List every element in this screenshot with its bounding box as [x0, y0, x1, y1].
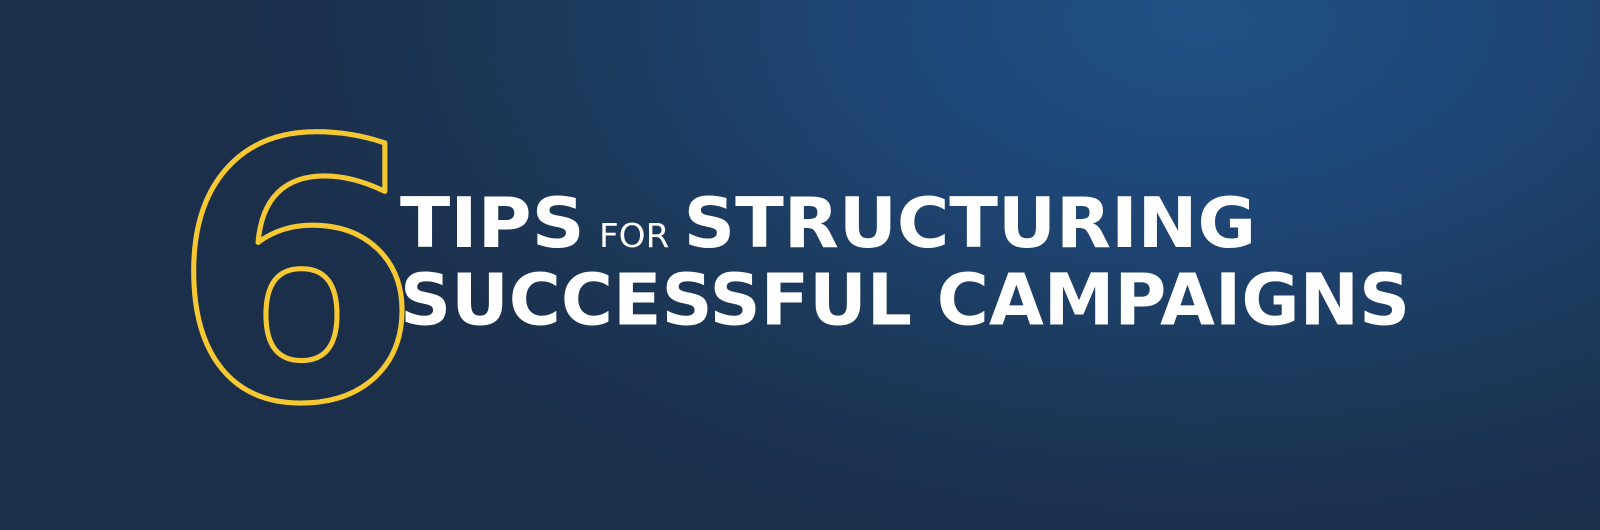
title line 1: TIPS: [400, 184, 585, 264]
title line 1: [400, 184, 1256, 264]
title: [400, 184, 1410, 341]
title line 1: STRUCTURING: [684, 184, 1256, 264]
title line 1: FOR: [599, 217, 669, 255]
big outlined number 6: 6: [171, 65, 421, 483]
title line 2: SUCCESSFUL CAMPAIGNS: [400, 258, 1410, 341]
